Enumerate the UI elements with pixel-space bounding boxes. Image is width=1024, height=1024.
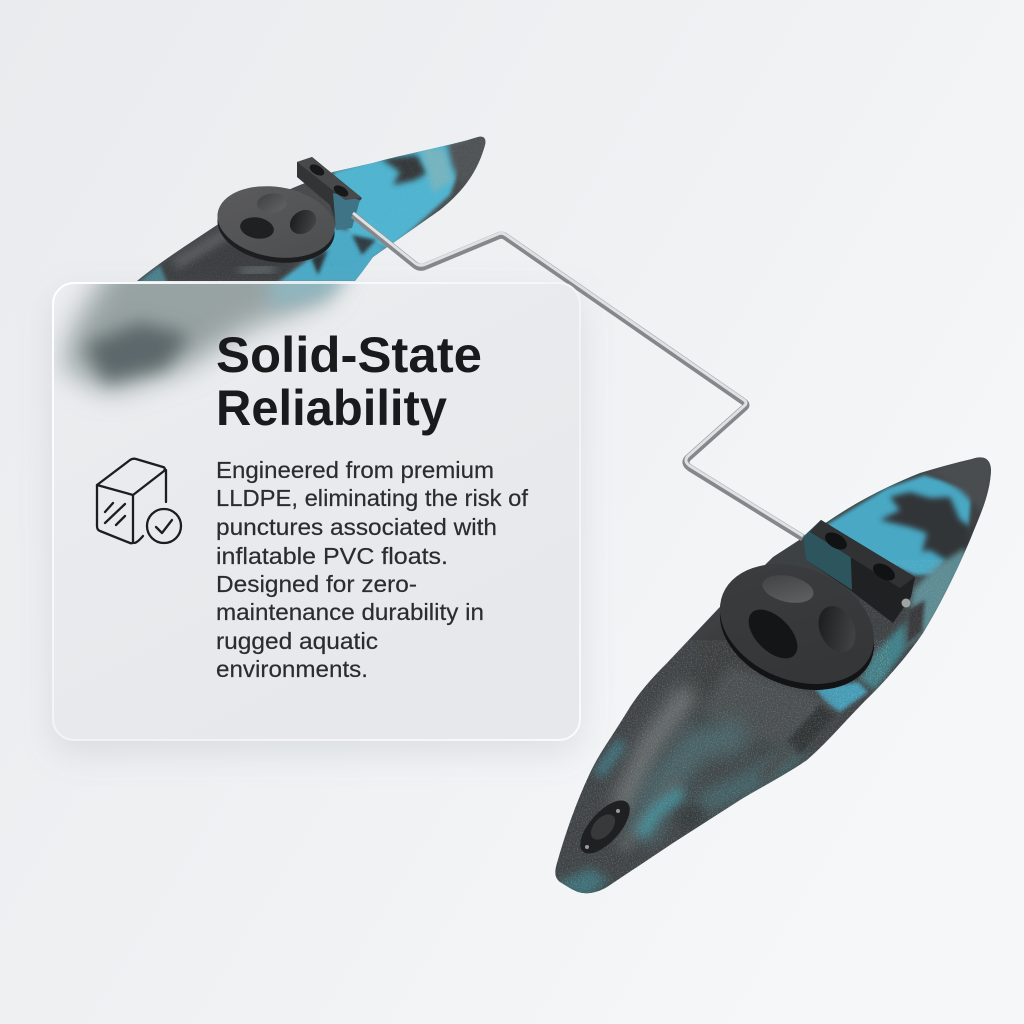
- lower bracket: [803, 520, 915, 623]
- body text: environments.: [216, 656, 368, 682]
- body text: LLDPE, eliminating the risk of: [216, 485, 528, 511]
- body text: rugged aquatic: [216, 628, 378, 654]
- infographic scene: [33, 136, 991, 894]
- icon: box with check: [97, 459, 181, 543]
- body text: Designed for zero-: [216, 571, 417, 597]
- upper float: [137, 136, 486, 281]
- heading: Solid-State: [216, 327, 482, 383]
- upper disc: [212, 183, 340, 271]
- lower float: [555, 457, 991, 894]
- body text: Engineered from premium: [216, 457, 494, 483]
- panel: glass card: [52, 258, 581, 741]
- body text: punctures associated with: [216, 514, 497, 540]
- body text: inflatable PVC floats.: [216, 543, 448, 569]
- wire frame: [353, 213, 803, 538]
- heading: Reliability: [216, 380, 447, 436]
- upper bracket: [297, 157, 362, 228]
- drain plug: [572, 792, 638, 862]
- body text: maintenance durability in: [216, 599, 484, 625]
- blurred float behind glass: [62, 258, 350, 392]
- lower disc: [702, 548, 892, 712]
